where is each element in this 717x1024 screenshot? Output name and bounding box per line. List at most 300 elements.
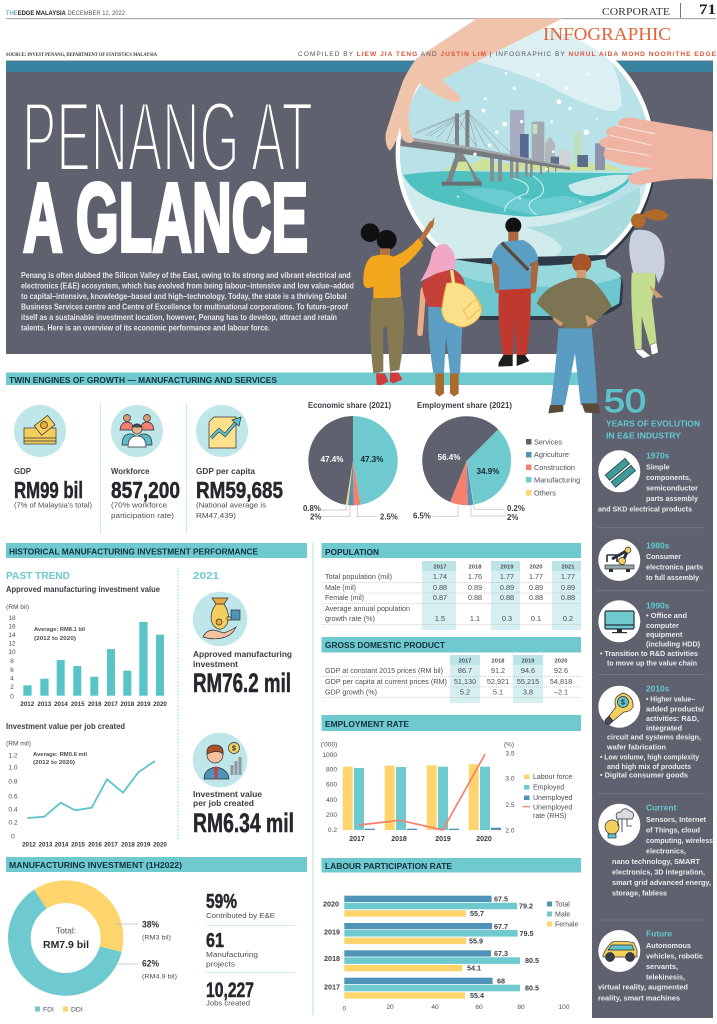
chart: investment value per job line: 0.6 — [8, 794, 18, 800]
timeline: future: reality, smart machines — [598, 993, 680, 1002]
table: population: 2019 — [501, 564, 514, 570]
stats: E&E, projects, jobs: Contributed by E&E — [206, 911, 275, 920]
legend: FDI DDI: DDI — [71, 1006, 83, 1014]
chart: labour participation bars: 0 — [342, 1006, 346, 1012]
chart: FDI and DDI donut: RM7.9 bil — [43, 940, 89, 951]
stats: E&E, projects, jobs: 59% — [206, 890, 237, 913]
chart: approved manufacturing investment bars: 2016 — [88, 701, 102, 708]
chart: investment value per job line: Average: RM0.6 mil — [33, 752, 87, 758]
panel: GDP stat: (7% of Malaysia's total) — [14, 500, 93, 510]
section header: manufacturing investment — [6, 857, 307, 872]
chart: employment bars and unemployment line: 2020 — [476, 836, 492, 843]
chart: labour participation bars: 80 — [517, 1004, 525, 1011]
stat: investment value per job: RM6.34 mil — [193, 808, 294, 838]
chart: employment bars and unemployment line — [321, 742, 515, 843]
chart: investment value per job line: 2016 — [88, 842, 102, 848]
timeline: 1990s: • Office and — [646, 611, 687, 620]
table: population: 0.88 — [561, 593, 575, 602]
table: population: 1.77 — [529, 572, 543, 581]
chart: approved manufacturing investment bars: 4 — [10, 676, 14, 682]
chart: employment bars and unemployment line: 200 — [326, 812, 337, 819]
section header: employment rate — [322, 715, 581, 731]
icon: workers — [111, 405, 163, 457]
table: population: POPULATION — [325, 547, 379, 557]
chart: labour participation bars: 79.5 — [520, 929, 534, 938]
title — [22, 81, 313, 272]
globe shadow — [397, 26, 656, 285]
right hand — [599, 117, 713, 185]
section header: employment rate: EMPLOYMENT RATE — [325, 719, 409, 729]
chart: investment value per job line: 2019 — [137, 842, 151, 848]
timeline: 2010s: and high mix of products — [607, 762, 691, 771]
timeline: current: nano technology, SMART — [612, 857, 701, 866]
chart: economic share pie: 2.5% — [380, 512, 398, 522]
chart: economic share pie: 0.8% — [303, 504, 321, 513]
chart: approved manufacturing investment bars: 2019 — [137, 701, 151, 708]
legend: FDI DDI: FDI — [43, 1006, 54, 1014]
timeline: 1970s: components, — [646, 473, 691, 482]
stat: investment value per job — [193, 733, 294, 838]
chart: investment value per job line: (2012 to 2020) — [33, 760, 75, 766]
section header: labour participation — [322, 858, 581, 872]
stats: E&E, projects, jobs — [206, 890, 295, 1008]
panel: 50 years of evolution heading: YEARS OF EVOLUTION — [606, 419, 700, 429]
legend: labour participation: Total — [555, 902, 570, 908]
table: population: 0.1 — [531, 614, 541, 623]
title: PENANG AT — [22, 81, 313, 192]
table: population: Female (mil) — [325, 593, 364, 602]
chart: approved manufacturing investment bars: 2 — [10, 684, 14, 691]
timeline: 2010s: activities: R&D, — [646, 714, 699, 723]
table: population: 1.76 — [468, 572, 482, 581]
chart: labour participation bars: 54.1 — [467, 964, 481, 972]
chart: employment bars and unemployment line: 600 — [326, 782, 337, 788]
table: gross domestic product: 2018 — [492, 658, 505, 664]
chart: employment share pie: 2% — [507, 513, 518, 522]
chart: investment value per job line: 2012 — [22, 842, 36, 848]
chart: employment share pie: 0.2% — [507, 504, 525, 513]
timeline: 1980s: Consumer — [646, 552, 681, 561]
chart: labour participation bars: 67.5 — [494, 894, 508, 904]
panel: workforce stat: participation rate) — [111, 511, 175, 520]
legend: sectors — [526, 438, 580, 498]
table: population: 0.89 — [561, 583, 575, 592]
table: population: Male (mil) — [325, 583, 356, 592]
timeline: 1970s: and SKD electrical products — [598, 505, 692, 514]
chart: approved manufacturing investment bars: 2012 — [20, 701, 35, 708]
section header: twin engines: TWIN ENGINES OF GROWTH — MANUFACTURING AND SERVICES — [9, 375, 277, 385]
stats: E&E, projects, jobs: projects — [206, 960, 235, 968]
table: population: 0.89 — [468, 583, 482, 592]
table: gross domestic product: 5.2 — [460, 688, 470, 696]
chart: investment value per job line: 0.8 — [8, 778, 18, 786]
chart: approved manufacturing investment bars: 10 — [8, 649, 16, 656]
timeline: 1980s: 1980s — [646, 540, 670, 550]
legend: employment: Employed — [533, 784, 564, 792]
icon: cloud and bulb — [598, 804, 640, 846]
chart: investment value per job line: (RM mil) — [6, 740, 31, 748]
panel: GDP stat: RM99 bil — [14, 477, 83, 503]
panel: GDP per capita stat: RM59,685 — [196, 477, 283, 503]
stat: approved manufacturing investment: Approved manufacturing — [193, 649, 292, 659]
legend: employment: Unemployed — [533, 795, 572, 802]
legend: sectors: Others — [534, 488, 556, 498]
timeline: current: electronics, — [646, 847, 686, 856]
chart: approved manufacturing investment bars: 2014 — [54, 701, 68, 708]
chart: approved manufacturing investment bars: Average: RM8.1 bil — [34, 627, 85, 633]
table: population: 2020 — [530, 564, 542, 570]
timeline: 1980s — [598, 539, 703, 582]
chart: employment bars and unemployment line: (%) — [504, 742, 514, 748]
legend: labour participation: Male — [555, 912, 570, 918]
chart: approved manufacturing investment bars: 8 — [10, 658, 14, 665]
timeline: 2010s: • Digital consumer goods — [600, 771, 688, 780]
chart: investment value per job line: 2014 — [55, 842, 69, 848]
chart: investment value per job line — [6, 722, 167, 848]
chart: investment value per job line: 2017 — [104, 842, 118, 848]
table: population: 0.2 — [563, 614, 573, 623]
chart: approved manufacturing investment bars: (2012 to 2020) — [34, 636, 76, 642]
legend: sectors: Manufacturing — [534, 476, 580, 484]
heading: 2021: 2021 — [193, 570, 219, 582]
chart: employment bars and unemployment line: 1000 — [322, 752, 337, 759]
masthead: 71 — [699, 2, 716, 18]
table: gross domestic product: 94.6 — [521, 666, 535, 675]
chart: approved manufacturing investment bars: 14 — [8, 632, 16, 639]
timeline: 2010s: • Low volume, high complexity — [600, 752, 699, 761]
timeline: 1990s: • Transition to R&D activities — [600, 649, 698, 658]
timeline: current: smart grid advanced energy, — [612, 878, 711, 887]
table: population: 2021 — [562, 564, 575, 570]
timeline: future: vehicles, robotic — [646, 952, 703, 961]
chart: economic share pie: 2% — [310, 512, 321, 522]
panel: 50 years of evolution heading: 50 — [604, 383, 646, 419]
globe base — [453, 255, 623, 320]
intro text: Penang is often dubbed the Silicon Valley of the East, owing to its strong and vibrant electrical and — [21, 271, 351, 280]
chart: employment bars and unemployment line: 800 — [326, 766, 337, 774]
chart: investment value per job line: 2015 — [71, 842, 85, 848]
table: gross domestic product: 2020 — [555, 658, 567, 664]
timeline: 2010s: circuit and systems design, — [607, 733, 701, 742]
chart: labour participation bars: 67.3 — [494, 949, 508, 958]
icon: money bag in hand — [193, 592, 247, 646]
table: gross domestic product: 51,130 — [454, 677, 476, 686]
table: population: 0.88 — [500, 593, 514, 602]
chart: labour participation bars: 80.5 — [525, 956, 539, 965]
table: population: 0.88 — [468, 593, 482, 602]
timeline: 2010s: integrated — [646, 724, 682, 733]
table: population: 2018 — [469, 564, 482, 570]
chart: investment value per job line: 1.2 — [8, 752, 18, 760]
panel: GDP per capita stat: RM47,439) — [196, 511, 237, 520]
table: population — [322, 543, 581, 630]
table: population: 0.87 — [433, 593, 447, 602]
icon: light bulb with dollar: $ — [621, 700, 625, 706]
chart: employment bars and unemployment line: 2018 — [391, 836, 407, 843]
table: gross domestic product: 2019 — [522, 658, 535, 664]
timeline: 1990s: to move up the value chain — [607, 659, 697, 668]
panel: workforce stat: (70% workforce — [111, 500, 167, 510]
table: gross domestic product: 55,215 — [517, 677, 539, 686]
table: population: 1.5 — [435, 614, 445, 623]
chart: labour participation bars: 20 — [386, 1004, 394, 1011]
chart: approved manufacturing investment bars: 16 — [8, 624, 16, 630]
chart: investment value per job line: 0.4 — [8, 806, 18, 814]
intro text: Business Services centre and Centre of Excellence for multinational corporations. To future–proof — [21, 302, 348, 312]
chart: employment share pie: Employment share (2021) — [417, 401, 512, 410]
timeline: current: electronics, 3D integration, — [612, 868, 705, 877]
timeline: future — [598, 929, 703, 1002]
illustration: hands and people — [361, 18, 713, 413]
chart: employment share pie: 56.4% — [438, 453, 460, 462]
heading: past trend: PAST TREND — [6, 570, 70, 582]
timeline: 1970s: 1970s — [646, 450, 670, 460]
timeline: current: Sensors, Internet — [646, 815, 707, 824]
timeline: future: servants, — [646, 962, 678, 971]
icon: rising chart — [196, 405, 248, 457]
legend: employment — [523, 774, 572, 820]
timeline: 1970s: semiconductor — [646, 484, 698, 493]
panel: workforce stat: 857,200 — [111, 477, 180, 503]
timeline: 1990s: equipment — [646, 630, 683, 639]
legend: labour participation — [547, 902, 578, 928]
table: gross domestic product — [322, 637, 581, 703]
chart: investment value per job line: 1.0 — [8, 764, 18, 772]
chart: labour participation bars: 40 — [431, 1004, 439, 1011]
table: population: 0.89 — [500, 583, 514, 592]
chart: investment value per job line: 0.2 — [8, 820, 18, 826]
timeline: current: Current — [646, 803, 676, 813]
chart: economic share pie: 47.3% — [361, 455, 383, 464]
chart: approved manufacturing investment bars: 2013 — [37, 701, 52, 708]
panel: workforce stat: Workforce — [111, 467, 150, 476]
chart: employment bars and unemployment line: 0.2 — [328, 827, 337, 834]
chart: investment value per job line: 2020 — [153, 842, 167, 848]
table: population: 1.74 — [433, 572, 447, 581]
table: gross domestic product: 92.6 — [554, 666, 568, 675]
chart: FDI and DDI donut: (RM4.9 bil) — [142, 974, 177, 980]
snow globe — [396, 27, 652, 259]
intro text: to capital–intensive, knowledge–based and high–technology. Today, the state is a thriving Global — [21, 292, 347, 301]
panel: 50 years of evolution heading: IN E&E INDUSTRY — [606, 431, 681, 441]
table: population: 1.77 — [561, 572, 575, 581]
table: gross domestic product: 91.2 — [491, 666, 505, 675]
chart: approved manufacturing investment bars: 6 — [10, 667, 14, 674]
chart: approved manufacturing investment bars: 2018 — [120, 701, 135, 708]
chart: labour participation bars: 100 — [558, 1004, 570, 1011]
masthead — [6, 2, 716, 19]
legend: sectors: Construction — [534, 463, 575, 472]
intro text: electronics (E&E) ecosystem, which has evolved from being labour–intensive and low value–added — [21, 282, 354, 290]
intro text — [21, 271, 354, 332]
chart: investment value per job line: 2013 — [39, 842, 53, 848]
table: gross domestic product: GDP at constant 2015 prices (RM bil) — [325, 666, 443, 675]
stats: E&E, projects, jobs: Manufacturing — [206, 950, 258, 959]
person: pale top — [629, 209, 668, 358]
panel: GDP per capita stat: GDP per capita — [196, 467, 256, 476]
chart: labour participation bars: 68 — [497, 976, 505, 986]
icon: car — [598, 930, 640, 972]
chart: FDI and DDI donut: (RM3 bil) — [142, 934, 171, 942]
credits: COMPILED BY LIEW JIA TENG AND JUSTIN LIM | INFOGRAPHIC BY NURUL AIDA MOHD NOOR/THE EDGE — [298, 51, 717, 58]
chart: economic share pie: 47.4% — [321, 455, 343, 464]
icon: money — [14, 405, 66, 457]
chart: approved manufacturing investment bars: 0 — [10, 694, 14, 700]
intro text: talents. Here is an overview of its economic performance and labour force. — [21, 324, 270, 332]
timeline: 2010s: wafer fabrication — [606, 742, 666, 751]
legend: employment: rate (RHS) — [533, 813, 566, 820]
table: gross domestic product: 52,921 — [487, 677, 509, 686]
chart: FDI and DDI donut: Total: — [56, 926, 76, 936]
chart: labour participation bars: 55.4 — [470, 991, 484, 1000]
table: population: 1.1 — [470, 614, 480, 623]
person: olive jacket — [537, 254, 612, 413]
table: gross domestic product: GDP per capita at current prices (RM) — [325, 677, 447, 686]
chart: labour participation bars: 2017 — [324, 982, 340, 992]
table: population: 0.3 — [502, 614, 512, 623]
chart: employment bars and unemployment line: 3.0 — [505, 776, 515, 782]
chart: approved manufacturing investment bars: 2020 — [153, 701, 167, 708]
stat: approved manufacturing investment: RM76.2 mil — [193, 668, 291, 698]
timeline: 1970s — [598, 450, 698, 514]
stat: approved manufacturing investment: investment — [193, 659, 238, 669]
panel: GDP stat: GDP — [14, 467, 31, 476]
chart: approved manufacturing investment bars — [6, 585, 167, 708]
table: population: growth rate (%) — [325, 614, 375, 623]
stat: investment value per job: per job created — [193, 798, 254, 808]
timeline: 1970s: Simple — [646, 462, 670, 471]
chart: employment bars and unemployment line: ('000) — [321, 742, 337, 748]
section header: historical investment: HISTORICAL MANUFACTURING INVESTMENT PERFORMANCE — [9, 546, 258, 556]
chart: approved manufacturing investment bars: (RM bil) — [6, 604, 29, 611]
section header: twin engines — [6, 372, 581, 385]
legend: employment: Labour force — [533, 774, 572, 781]
chart: investment value per job line: Investment value per job created — [6, 722, 125, 731]
chart: labour participation bars: 55.9 — [469, 936, 483, 946]
chart: approved manufacturing investment bars: 18 — [8, 615, 16, 622]
stats: E&E, projects, jobs: 10,227 — [206, 979, 254, 1002]
chart: employment bars and unemployment line: 2.5 — [505, 802, 515, 809]
chart: FDI and DDI donut: 38% — [142, 920, 159, 930]
table: gross domestic product: 3.8 — [523, 688, 533, 696]
stats: E&E, projects, jobs: Jobs created — [206, 998, 250, 1008]
chart: FDI and DDI donut — [8, 880, 177, 996]
stat: investment value per job: Investment value — [193, 789, 262, 799]
chart: approved manufacturing investment bars: 12 — [8, 640, 16, 648]
title: A GLANCE — [23, 163, 308, 272]
panel: 50 years of evolution heading — [604, 383, 700, 441]
chart: approved manufacturing investment bars: Approved manufacturing investment value — [6, 585, 161, 594]
table: population: 1.77 — [500, 572, 514, 581]
section header: labour participation: LABOUR PARTICIPATION RATE — [325, 861, 452, 871]
legend: sectors: Agriculture — [534, 450, 569, 459]
chart: employment share pie: 34.9% — [477, 467, 499, 476]
icon: computer monitor — [598, 600, 640, 642]
chart: labour participation bars: 55.7 — [470, 909, 484, 918]
chart: labour participation bars: 60 — [475, 1004, 483, 1011]
chart: economic share pie: Economic share (2021) — [308, 401, 391, 410]
table: gross domestic product: 54,818 — [550, 677, 572, 686]
table: population: 0.89 — [529, 583, 543, 592]
table: gross domestic product: GDP growth (%) — [325, 688, 377, 696]
table: gross domestic product: 5.1 — [493, 688, 503, 696]
timeline: 1970s: parts assembly — [646, 494, 698, 503]
timeline: current: storage, fabless — [612, 889, 667, 898]
person: blue tee — [492, 218, 538, 367]
timeline: 1980s: to full assembly — [646, 573, 699, 582]
stat: approved manufacturing investment — [193, 592, 292, 698]
left hand — [386, 18, 563, 151]
chart: labour participation bars: 80.5 — [525, 984, 539, 992]
timeline: 2010s: • Higher value– — [646, 695, 695, 704]
table: gross domestic product: 2017 — [459, 658, 471, 664]
legend: employment: Unemployed — [533, 804, 572, 812]
timeline: 1990s: 1990s — [646, 600, 670, 610]
chart: labour participation bars: 2020 — [323, 900, 339, 908]
chart: labour participation bars: 67.7 — [494, 922, 508, 931]
panel: workforce stat — [111, 405, 180, 520]
timeline: 2010s: 2010s — [646, 684, 670, 694]
person: pink hair with backpack — [420, 244, 482, 397]
icon: memory chips — [598, 450, 640, 492]
table: population: 0.88 — [529, 593, 543, 602]
timeline: 1990s: (including HDD) — [646, 640, 701, 649]
chart: employment bars and unemployment line: 2019 — [435, 836, 451, 843]
timeline: current — [598, 803, 713, 898]
timeline: 1980s: electronics parts — [646, 563, 703, 572]
legend: FDI DDI — [35, 1006, 83, 1014]
section header: manufacturing investment: MANUFACTURING INVESTMENT (1H2022) — [9, 860, 182, 870]
legend: sectors: Services — [534, 438, 562, 446]
table: population: Total population (mil) — [325, 572, 392, 581]
chart: approved manufacturing investment bars: 2015 — [71, 701, 85, 708]
timeline: 1990s — [598, 600, 701, 668]
infographic label: INFOGRAPHIC — [543, 24, 671, 44]
chart: employment share pie: 6.5% — [413, 512, 431, 520]
masthead: CORPORATE — [602, 7, 670, 18]
chart: investment value per job line: 0 — [11, 834, 15, 840]
icon: robot arm — [598, 539, 640, 581]
icon: businessman with chart: $ — [232, 746, 236, 752]
table: gross domestic product: –2.1 — [554, 688, 568, 696]
table: population: 2017 — [434, 564, 446, 570]
table: gross domestic product: 86.7 — [458, 666, 472, 675]
chart: labour participation bars: 2019 — [324, 928, 340, 936]
legend: labour participation: Female — [555, 922, 578, 928]
timeline: current: of Things, cloud — [646, 826, 700, 835]
chart: labour participation bars: 2018 — [324, 954, 340, 963]
chart: employment bars and unemployment line: 3.5 — [505, 750, 515, 758]
person: orange top — [361, 217, 435, 385]
panel: GDP per capita stat — [196, 405, 283, 520]
chart: labour participation bars — [323, 894, 570, 1012]
timeline: 2010s: added products/ — [646, 704, 704, 713]
table: population: Average annual population — [325, 604, 410, 613]
chart: employment bars and unemployment line: 2017 — [349, 836, 365, 843]
chart: employment bars and unemployment line: 400 — [326, 797, 337, 804]
chart: FDI and DDI donut: 62% — [142, 958, 159, 968]
panel: GDP stat — [14, 405, 93, 510]
chart: approved manufacturing investment bars: 2017 — [104, 701, 118, 708]
chart: economic share pie — [303, 401, 398, 522]
timeline: 1990s: computer — [646, 621, 679, 630]
timeline: future: virtual reality, augmented — [598, 982, 688, 991]
chart: labour participation bars: 79.2 — [519, 902, 533, 910]
timeline: future: Future — [646, 929, 672, 939]
chart: employment share pie — [413, 401, 525, 522]
source line: SOURCE: INVEST PENANG, DEPARTMENT OF STATISTICS MALAYSIA — [6, 53, 157, 58]
timeline: future: Autonomous — [646, 941, 691, 950]
